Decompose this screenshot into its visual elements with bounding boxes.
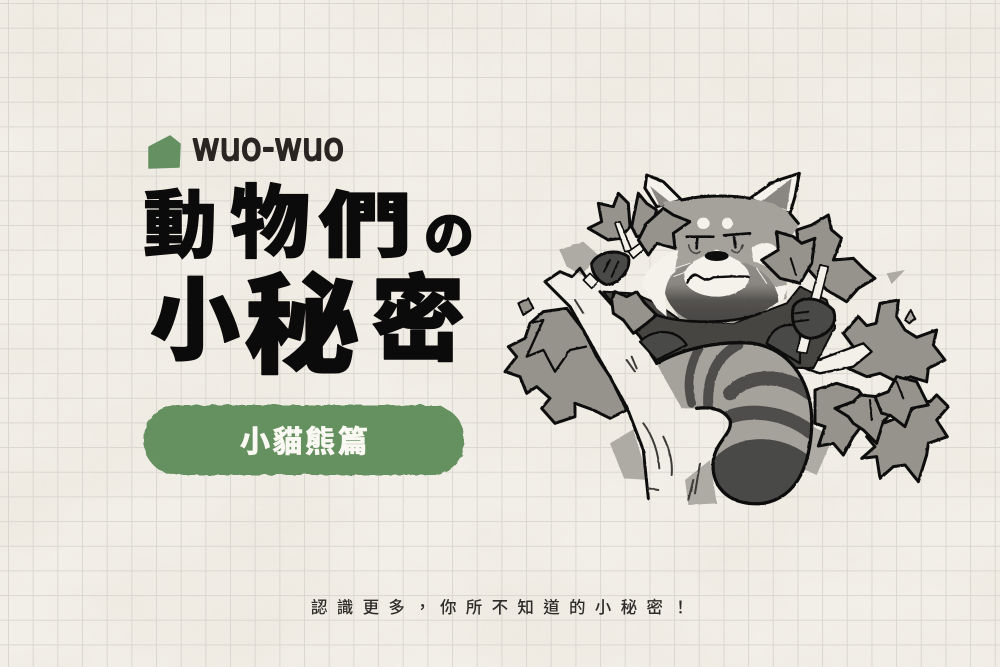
big left leaf: [505, 308, 627, 423]
cheeks: [642, 250, 678, 317]
face: [663, 196, 800, 323]
brows and eyes: [687, 233, 750, 248]
whiskers: [673, 262, 775, 283]
logo: [149, 125, 344, 169]
trunk motion lines: [575, 300, 700, 500]
tail arms: [640, 332, 687, 360]
title line 2: 秘: [244, 266, 360, 387]
tree trunk outline: [545, 268, 657, 498]
leaves: top left: [588, 193, 657, 240]
title line 1: 動: [143, 184, 217, 267]
twig left: [615, 222, 632, 252]
tail stripes: [689, 345, 817, 510]
title line 1: の: [424, 208, 474, 264]
title line 2: 小: [150, 272, 240, 372]
muzzle: [684, 257, 749, 297]
title line 1: 們: [318, 185, 412, 267]
leaf in front of face: [638, 208, 690, 255]
pill label: 小貓熊篇: [240, 426, 370, 459]
title line 2: 密: [371, 268, 465, 373]
left ear: [645, 175, 682, 207]
leaf by left arm: [612, 292, 657, 333]
illustration: red panda on a tree: [505, 173, 948, 510]
head: [642, 173, 800, 323]
left hand: [583, 252, 629, 288]
chin line: [657, 313, 760, 322]
forehead spots: [697, 218, 710, 229]
subtitle pill: [144, 405, 464, 475]
title line 1: 物: [230, 179, 310, 268]
title line 1: [143, 179, 474, 268]
right hand leaf: [762, 232, 815, 283]
mouth: [687, 275, 748, 283]
title line 2: [150, 266, 465, 387]
tail: [657, 343, 817, 510]
leaves: right cluster: [815, 300, 948, 482]
branch: [800, 343, 872, 373]
tagline: 認識更多，你所不知道的小秘密！: [311, 597, 698, 617]
body: [603, 287, 835, 368]
lower face: [665, 263, 778, 323]
right hand with twig: [792, 265, 835, 353]
icon: green house: [149, 136, 180, 168]
shadow shapes: [559, 242, 905, 505]
leaves: right of head: [797, 215, 875, 302]
nose: [705, 251, 729, 261]
pill background: [144, 405, 464, 475]
title: [143, 179, 474, 387]
right ear: [750, 173, 799, 213]
logo wordmark: wuo-wuo: [192, 125, 344, 169]
